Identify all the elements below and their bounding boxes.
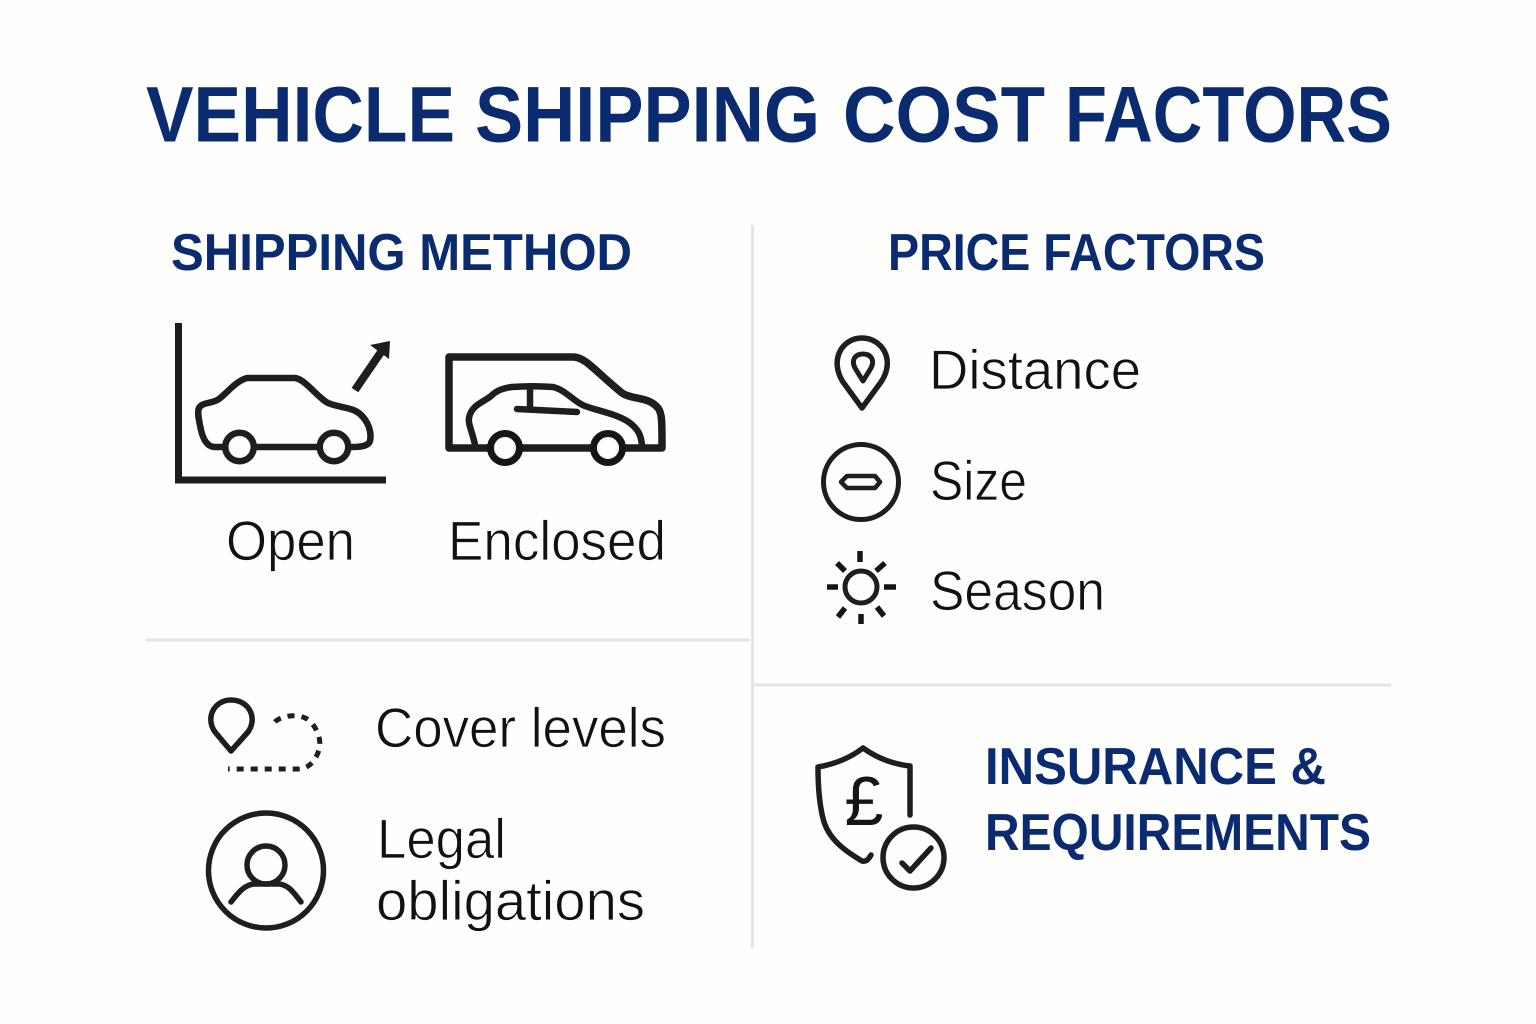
label: legal obligations bbox=[376, 807, 645, 932]
heading: shipping method: SHIPPING METHOD bbox=[171, 224, 632, 282]
label: open: Open bbox=[226, 509, 355, 572]
label: size: Size bbox=[930, 449, 1027, 512]
pound sign: £ bbox=[845, 762, 883, 840]
icon: open transport car on axes with arrow bbox=[178, 323, 390, 480]
heading: price factors: PRICE FACTORS bbox=[888, 224, 1265, 282]
icon: enclosed transport car in van bbox=[449, 357, 662, 462]
icon: person in circle bbox=[208, 813, 324, 928]
heading: insurance and requirements: REQUIREMENTS bbox=[985, 804, 1371, 862]
icon: sun bbox=[827, 551, 896, 624]
heading: insurance and requirements bbox=[985, 738, 1371, 862]
icon: shield with pound sign and check bbox=[818, 748, 944, 888]
icon: size circle bbox=[824, 444, 898, 520]
title: FACTORS bbox=[1065, 70, 1392, 158]
label: enclosed: Enclosed bbox=[448, 509, 666, 572]
panel: cover and legal bbox=[208, 696, 666, 932]
icon: location pin bbox=[837, 338, 887, 408]
label: cover levels: Cover levels bbox=[375, 696, 666, 759]
title: SHIPPING bbox=[475, 70, 820, 158]
panel: shipping method bbox=[171, 224, 666, 572]
title bbox=[146, 70, 1392, 158]
panel: insurance and requirements bbox=[818, 738, 1371, 888]
title: COST bbox=[843, 70, 1045, 158]
panel: price factors bbox=[824, 224, 1265, 624]
label: legal obligations: Legal bbox=[377, 807, 506, 870]
label: distance: Distance bbox=[929, 338, 1141, 401]
heading: insurance and requirements: INSURANCE & bbox=[985, 738, 1326, 796]
label: legal obligations: obligations bbox=[376, 869, 645, 932]
title: VEHICLE bbox=[146, 70, 455, 158]
icon: pin with dashed route bbox=[211, 700, 320, 769]
label: season: Season bbox=[930, 559, 1105, 622]
